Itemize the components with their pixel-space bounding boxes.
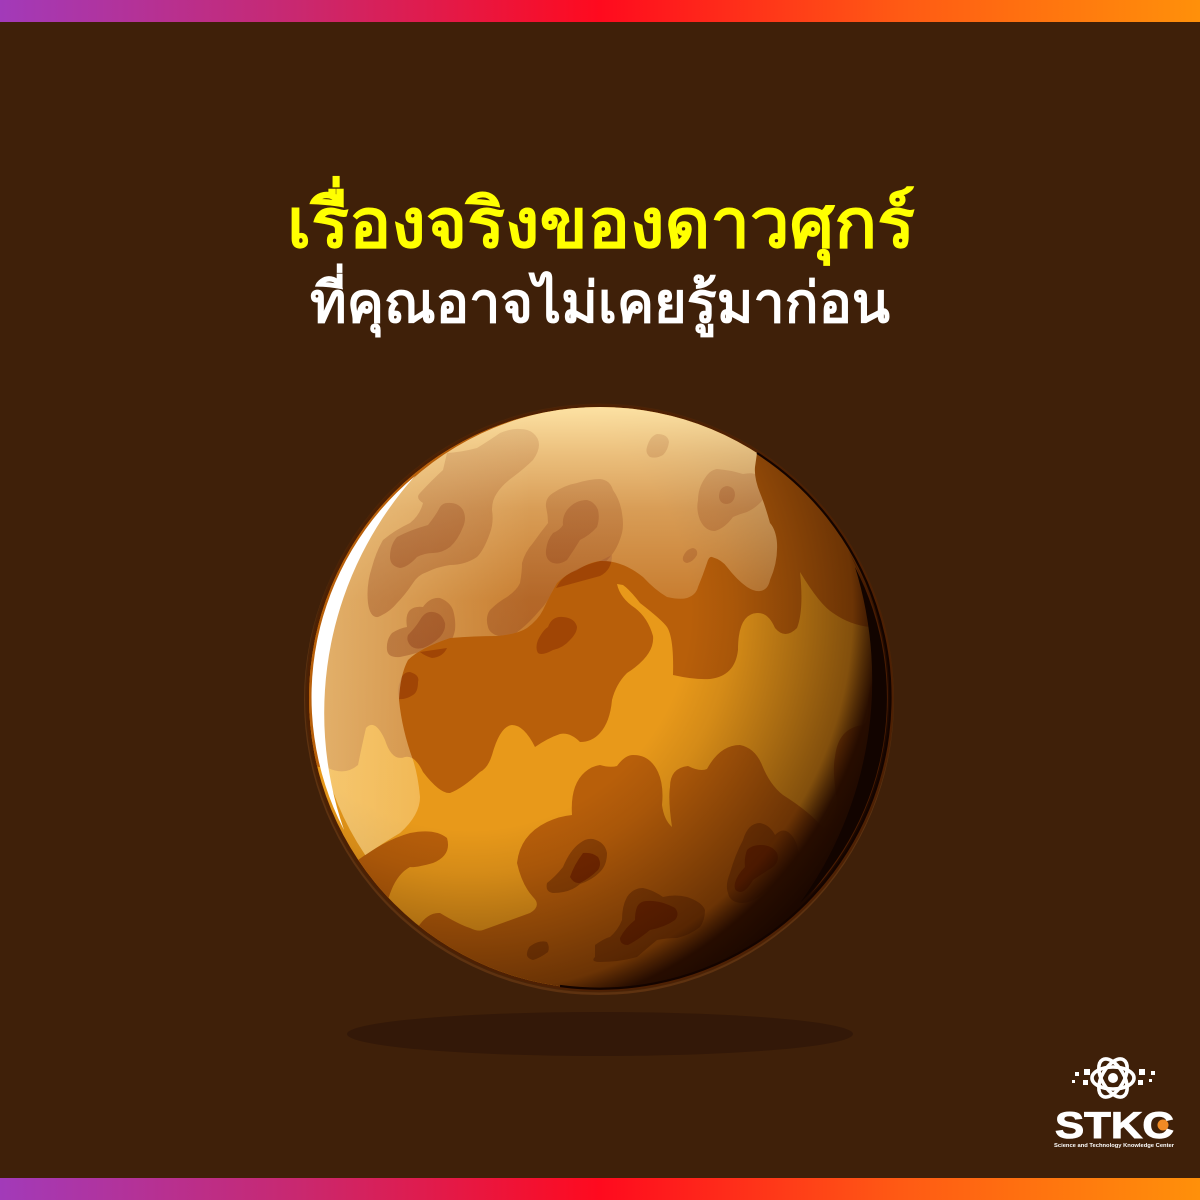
glass highlight (324, 407, 778, 855)
dark spots on land (398, 555, 612, 699)
terminator shadow (305, 403, 895, 993)
orange base surface (300, 400, 900, 1000)
planet Venus (304, 404, 894, 995)
translucent craters (368, 429, 765, 657)
dark land lower (419, 728, 854, 988)
title (287, 175, 915, 338)
bottom gradient bar (0, 1178, 1200, 1200)
rim lit strip right (808, 553, 888, 897)
STKC logo (1054, 1054, 1175, 1149)
title line 1: เรื่องจริงของดาวศุกร์ (287, 175, 915, 266)
logo orange dot (1158, 1120, 1168, 1130)
logo wordmark: STKC (1055, 1105, 1174, 1146)
rim dark outer line right (560, 453, 891, 989)
title line 2: ที่คุณอาจไม่เคยรู้มาก่อน (310, 263, 890, 338)
rim dark crescent right (800, 567, 887, 903)
top gradient bar (0, 0, 1200, 22)
lower crater spots outer (527, 823, 798, 962)
dark land upper (309, 407, 872, 793)
lower crater spots inner (570, 845, 778, 945)
white crescent highlight (312, 476, 415, 830)
dark land lower left (358, 831, 448, 898)
planet ground shadow (347, 1012, 853, 1056)
logo tagline: Science and Technology Knowledge Center (1054, 1143, 1175, 1149)
outer halo ring (304, 405, 894, 995)
translucent inner craters (390, 486, 735, 649)
logo atom icon (1072, 1054, 1155, 1102)
